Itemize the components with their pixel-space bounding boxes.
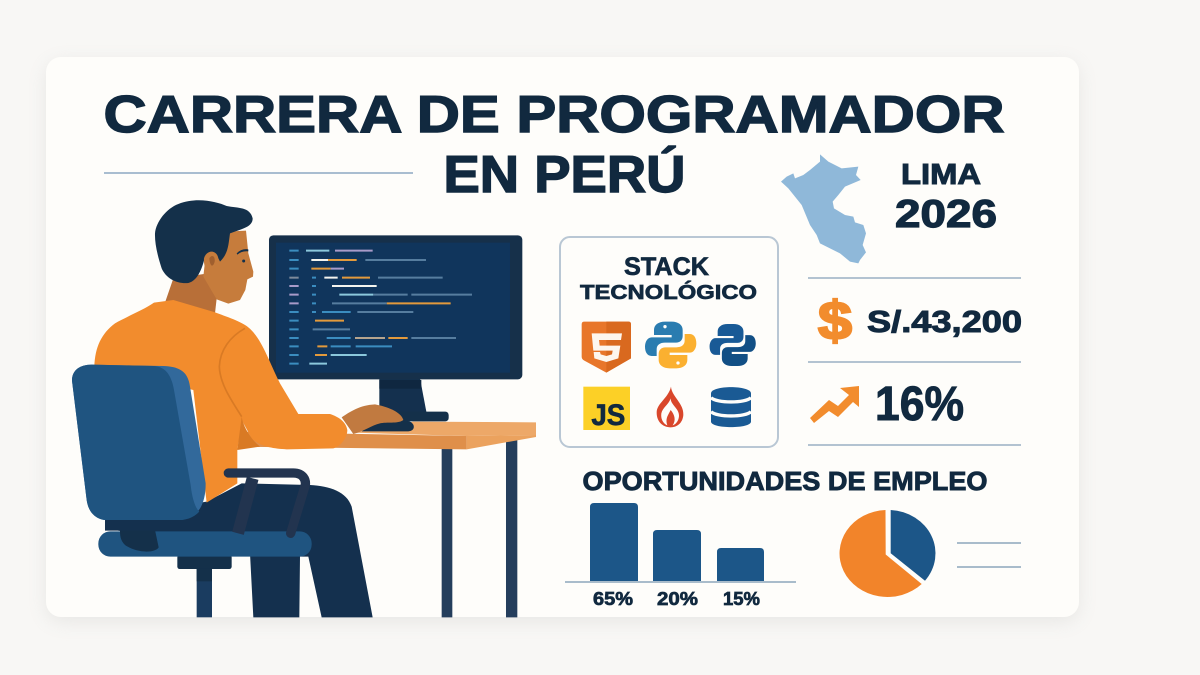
pie chart <box>840 510 935 597</box>
panel: stack tecnológico <box>560 237 778 447</box>
pants <box>105 483 373 617</box>
code lines <box>289 251 472 364</box>
armrest <box>228 473 305 533</box>
mouse <box>362 421 414 431</box>
bar chart: 20% <box>657 589 698 609</box>
bar chart: 65% <box>593 589 633 609</box>
location and year <box>895 159 997 236</box>
location and year: LIMA <box>901 159 981 191</box>
title <box>104 86 1004 204</box>
technology icons <box>582 322 756 432</box>
ear <box>204 252 219 275</box>
pie legend lines <box>957 542 1021 568</box>
shirt <box>94 300 347 503</box>
stack heading: STACK <box>624 253 709 281</box>
bar chart <box>565 503 796 609</box>
office chair <box>72 365 312 617</box>
illustration: programmer at desk <box>72 200 536 617</box>
title: CARRERA DE PROGRAMADOR <box>104 86 1004 144</box>
icon: dollar: $ <box>818 291 852 351</box>
desk <box>238 422 536 617</box>
salary: S/.43,200 <box>867 304 1022 339</box>
location and year: 2026 <box>895 193 997 236</box>
growth <box>810 378 964 431</box>
growth: 16% <box>875 378 964 431</box>
neck and head <box>155 200 253 313</box>
title: EN PERÚ <box>444 146 686 204</box>
icon: python color <box>645 322 696 368</box>
hair <box>155 200 253 283</box>
hand <box>342 404 403 434</box>
bar chart: 15% <box>723 589 760 609</box>
stack heading: TECNOLÓGICO <box>580 280 757 304</box>
salary <box>818 291 1022 351</box>
icon: html5 <box>582 322 631 373</box>
card background <box>46 57 1079 617</box>
heading: oportunidades de empleo: OPORTUNIDADES DE EMPLEO <box>582 466 988 496</box>
monitor <box>269 235 522 421</box>
icon: database <box>711 387 751 427</box>
icon: flame <box>657 387 683 427</box>
icon: python blue <box>710 324 756 366</box>
icon: javascript: JS <box>591 399 625 432</box>
icon: javascript <box>583 387 630 432</box>
stack heading <box>580 253 757 304</box>
icon: rising arrow <box>810 386 859 423</box>
map of Peru <box>781 154 866 263</box>
